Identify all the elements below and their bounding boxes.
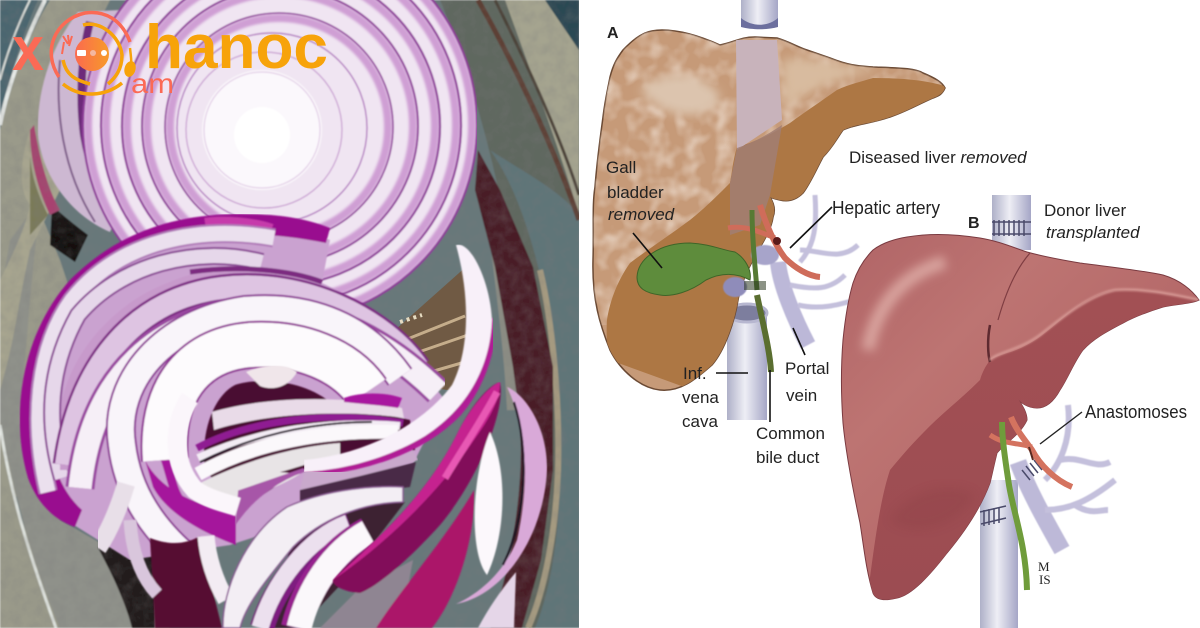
white arc — [296, 532, 368, 628]
label: gall bladder removed: bladder — [607, 183, 664, 202]
logo outer coral ring — [51, 12, 130, 77]
right magenta wedges — [320, 382, 547, 628]
inferior vena cava — [727, 304, 767, 420]
purple strip — [197, 417, 403, 448]
rings lilac haze — [88, 0, 472, 317]
logo centre disc — [75, 37, 109, 71]
label: anastomoses: Anastomoses — [1085, 402, 1187, 422]
portal vein — [723, 195, 858, 345]
label: gall bladder removed: removed — [608, 205, 675, 224]
upper pale strip — [212, 399, 404, 430]
long sweeping slice — [304, 245, 493, 472]
dark cavity — [203, 380, 416, 493]
concentric rings fill — [83, 0, 477, 322]
logo inner orange ring — [63, 24, 122, 84]
label: gall bladder removed: Gall — [606, 158, 636, 177]
logo suffix am: am — [131, 68, 174, 99]
label: hepatic artery: Hepatic artery — [832, 198, 940, 218]
gall bladder — [637, 243, 750, 295]
inner thick arc — [164, 345, 367, 460]
outer magenta band — [20, 214, 330, 527]
photo: red onion slices on a metal tray — [0, 0, 580, 628]
bile duct pointer — [769, 370, 771, 422]
common bile duct — [744, 210, 771, 372]
grey-white wedge — [200, 443, 340, 503]
left white short strip — [98, 484, 126, 548]
gall bladder pointer — [633, 233, 662, 268]
artist signature: M — [1038, 559, 1050, 574]
artist signature: IS — [1039, 572, 1051, 587]
label: donor liver transplanted: Donor liver — [1044, 201, 1127, 220]
cut onion arcs — [20, 214, 445, 560]
rings purple lines — [83, 0, 477, 322]
upper vena cava with stitches — [992, 195, 1031, 250]
panel: white diagram background — [579, 0, 1200, 628]
vena cava pointer — [716, 372, 748, 374]
lilac purple sheen — [238, 470, 304, 518]
maroon block — [150, 536, 222, 628]
label: portal vein: Portal — [785, 359, 829, 378]
lilac strip under sweep — [300, 445, 418, 490]
label: inferior vena cava: cava — [682, 412, 718, 431]
thin lilac arc — [262, 525, 350, 628]
hepatic artery — [990, 417, 1072, 487]
diagram A: diseased liver removed — [590, 0, 950, 422]
diseased liver — [590, 25, 950, 400]
outer left crescents — [38, 9, 119, 232]
shadow under wide arc — [270, 502, 405, 628]
inner white arc end — [177, 398, 238, 507]
label: common bile duct: bile duct — [756, 448, 820, 467]
white fragment in cavity — [246, 366, 297, 388]
label: inferior vena cava: Inf. — [683, 364, 707, 383]
portal vein — [1018, 405, 1115, 550]
arcs backing — [59, 234, 443, 560]
white strip — [206, 536, 226, 600]
donor liver — [842, 234, 1199, 600]
shadow under sweep — [300, 462, 416, 502]
label: portal vein: vein — [786, 386, 817, 405]
tray background — [0, 0, 580, 628]
label: inferior vena cava: vena — [682, 388, 719, 407]
label: panel letter B: B — [968, 215, 980, 232]
diagram B: donor liver transplanted — [842, 195, 1199, 628]
superior vena cava stump — [741, 0, 778, 29]
central strips and cavity — [98, 366, 418, 628]
wide arc — [223, 487, 403, 628]
main thick arc — [121, 309, 400, 556]
onion round slice — [38, 0, 477, 322]
portal vein pointer — [793, 328, 805, 355]
hepatic artery — [728, 205, 820, 277]
common bile duct — [1002, 422, 1027, 590]
onion centre highlight — [234, 107, 290, 163]
portal vein stitches — [1022, 460, 1042, 480]
label: diseased liver removed: Diseased liver removed — [849, 148, 1027, 167]
logo letter x: x — [12, 15, 44, 84]
anastomoses pointer — [1040, 412, 1082, 444]
label: donor liver transplanted: transplanted — [1046, 223, 1140, 242]
label: common bile duct: Common — [756, 424, 825, 443]
hepatic artery pointer — [790, 207, 832, 248]
lilac strip — [130, 520, 157, 594]
logo icon: fork — [62, 35, 72, 54]
magenta band below main arc — [145, 453, 236, 545]
brass ornament — [398, 270, 467, 390]
white bands — [39, 234, 274, 492]
logo icon: spoon — [123, 48, 137, 78]
label: panel letter A: A — [607, 25, 619, 42]
logo lower orange arc — [63, 83, 122, 94]
lower vena cava with stitches — [980, 480, 1018, 628]
logo wordmark hanoc: hanoc — [145, 13, 328, 82]
logo: xohanoc am — [12, 12, 328, 99]
